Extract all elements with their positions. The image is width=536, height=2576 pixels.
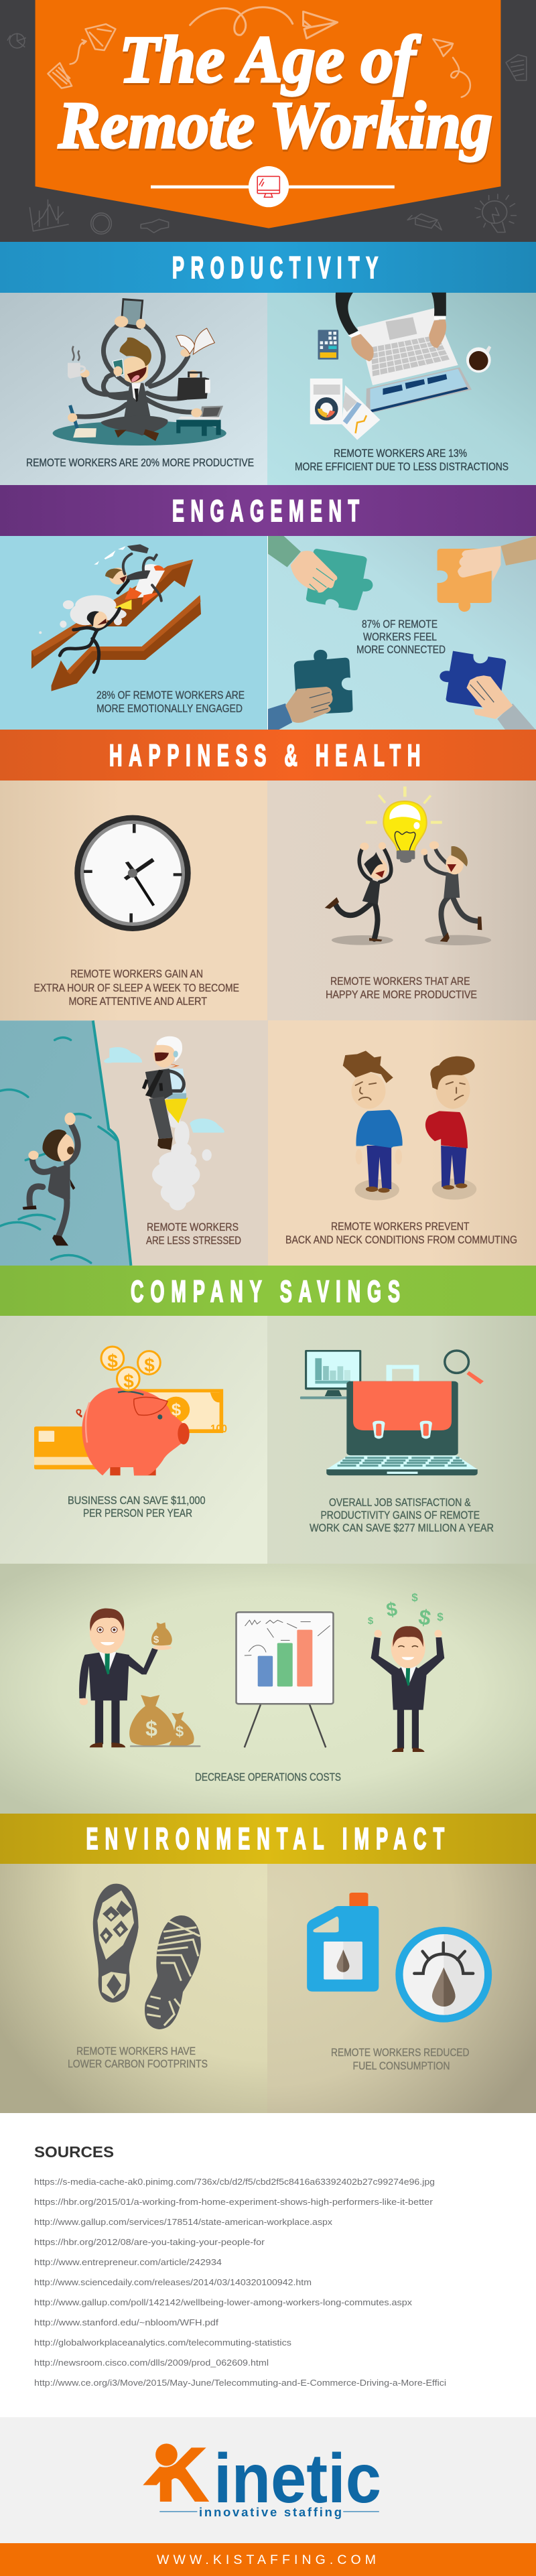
dollar signs: $	[153, 1634, 159, 1645]
caption: WORKERS FEEL	[363, 631, 437, 643]
caption: HAPPY ARE MORE PRODUCTIVE	[326, 989, 477, 1001]
footer: Kinetic logo	[0, 2417, 536, 2543]
footer band: website: WWW.KISTAFFING.COM	[157, 2553, 376, 2567]
heading band: company savings	[0, 1266, 536, 1316]
caption	[68, 1495, 206, 1519]
footer band: website	[0, 2543, 536, 2576]
icon: fuel can and gauge	[307, 1893, 492, 2023]
panel: 20% more productive	[0, 293, 267, 485]
caption	[326, 975, 477, 1001]
caption: MORE EMOTIONALLY ENGAGED	[96, 703, 243, 715]
coin and note labels: $	[172, 1400, 182, 1420]
source links: https://hbr.org/2012/08/are-you-taking-your-people-for	[34, 2237, 265, 2247]
header: title banner	[0, 0, 536, 242]
caption	[295, 448, 509, 473]
dollar signs: $	[411, 1591, 418, 1604]
cheering man	[371, 1626, 444, 1752]
illustration: piggy bank with coins	[34, 1347, 223, 1475]
caption: PRODUCTIVITY GAINS OF REMOTE	[320, 1509, 480, 1521]
caption: REMOTE WORKERS HAVE	[76, 2045, 196, 2057]
caption: PER PERSON PER YEAR	[83, 1507, 192, 1519]
dollar signs: $	[145, 1716, 157, 1741]
title: Remote Working	[58, 88, 492, 162]
man with money bag	[79, 1609, 172, 1747]
caption: MORE ATTENTIVE AND ALERT	[68, 996, 207, 1008]
caption: REMOTE WORKERS GAIN AN	[70, 968, 203, 980]
title: The Age of	[119, 22, 421, 96]
panel: extra hour of sleep	[0, 781, 267, 1020]
panel: less stressed	[0, 1020, 268, 1266]
caption: 87% OF REMOTE	[362, 618, 438, 630]
title	[58, 22, 492, 162]
heading band: environmental impact: ENVIRONMENTAL IMPACT	[86, 1822, 444, 1856]
caption: REMOTE WORKERS	[147, 1221, 239, 1233]
panel: emotionally engaged	[0, 536, 267, 730]
coin and note labels	[107, 1351, 227, 1435]
source links: https://hbr.org/2015/01/a-working-from-home-experiment-shows-high-performers-like-it-better	[34, 2197, 433, 2207]
panel: 13% more efficient	[267, 293, 536, 485]
logo tagline: innovative staffing	[199, 2505, 342, 2519]
caption: REMOTE WORKERS PREVENT	[331, 1221, 469, 1233]
caption	[68, 2045, 208, 2070]
money bags	[129, 1623, 194, 1747]
coin and note labels: $	[123, 1371, 134, 1392]
heading band: productivity: PRODUCTIVITY	[172, 251, 378, 285]
source links	[34, 2177, 446, 2388]
caption	[356, 618, 446, 656]
illustration: laptop from above	[310, 293, 491, 440]
caption: LOWER CARBON FOOTPRINTS	[68, 2058, 208, 2070]
heading band: happiness and health	[0, 730, 536, 781]
doodles on banner	[48, 7, 470, 97]
orange pennant banner	[36, 0, 500, 228]
dollar signs: $	[176, 1723, 184, 1740]
dollar signs: $	[368, 1615, 374, 1627]
heading band: engagement	[0, 485, 536, 536]
coin and note labels: 100	[210, 1422, 227, 1435]
illustration: businessmen and chart board	[79, 1609, 444, 1752]
panel: happy workers	[267, 781, 536, 1020]
illustration: puzzle pieces and hands	[268, 536, 536, 731]
heading band: happiness and health: HAPPINESS & HEALTH	[109, 738, 420, 772]
source links: http://www.stanford.edu/~nbloom/WFH.pdf	[34, 2317, 218, 2327]
illustration: arrows and rocket	[31, 544, 201, 691]
caption: ARE LESS STRESSED	[146, 1235, 241, 1247]
icon: wall clock	[74, 815, 191, 931]
caption: OVERALL JOB SATISFACTION &	[329, 1497, 470, 1509]
panel: feel more connected	[268, 536, 536, 731]
dollar signs: $	[385, 1599, 399, 1621]
background doodles on dark	[7, 33, 527, 234]
source links: http://www.gallup.com/services/178514/state-american-workplace.aspx	[34, 2217, 333, 2227]
panel: save $11,000	[0, 1316, 267, 1564]
caption	[96, 689, 245, 715]
caption	[146, 1221, 241, 1247]
sources heading: SOURCES	[34, 2143, 114, 2161]
illustration: briefcase on laptop	[300, 1350, 484, 1475]
logo mark: orange K figure	[143, 2443, 379, 2512]
flip chart	[237, 1612, 333, 1747]
caption	[331, 2047, 470, 2072]
illustration: two sad men	[343, 1050, 476, 1201]
icon: shoe soles	[93, 1884, 201, 2029]
source links: http://globalworkplaceanalytics.com/telecommuting-statistics	[34, 2337, 292, 2348]
caption: FUEL CONSUMPTION	[352, 2060, 450, 2072]
source links: http://www.sciencedaily.com/releases/2014/03/140320100942.htm	[34, 2277, 312, 2287]
source links: https://s-media-cache-ak0.pinimg.com/736x/cb/d2/f5/cbd2f5c8416a63392402b27c99274e96.jpg	[34, 2177, 435, 2187]
dollar signs: $	[417, 1605, 433, 1630]
caption: BUSINESS CAN SAVE $11,000	[68, 1495, 206, 1507]
source links: http://www.ce.org/i3/Move/2015/May-June/Telecommuting-and-E-Commerce-Driving-a-More-Effici	[34, 2378, 446, 2388]
caption: REMOTE WORKERS ARE 20% MORE PRODUCTIVE	[26, 457, 254, 469]
caption: DECREASE OPERATIONS COSTS	[195, 1771, 341, 1783]
heading band: engagement: ENGAGEMENT	[172, 494, 359, 528]
caption: MORE CONNECTED	[356, 644, 446, 656]
source links: http://newsroom.cisco.com/dlls/2009/prod_062609.html	[34, 2358, 269, 2368]
illustration: multitasking businessman	[53, 298, 226, 446]
caption	[310, 1497, 494, 1534]
illustration: two men and light bulb	[325, 787, 491, 945]
dollar signs: $	[437, 1611, 444, 1623]
divider line with monitor badge	[151, 166, 395, 207]
caption: REMOTE WORKERS ARE 13%	[334, 448, 467, 460]
caption: REMOTE WORKERS REDUCED	[331, 2047, 470, 2059]
panel: job satisfaction saves $277 million	[267, 1316, 536, 1564]
panel: decrease operations costs	[0, 1564, 536, 1814]
source links: http://www.entrepreneur.com/article/242934	[34, 2257, 222, 2267]
caption: WORK CAN SAVE $277 MILLION A YEAR	[310, 1522, 494, 1534]
illustration: cliff climber and jetpack man	[0, 1020, 224, 1266]
coin and note labels: $	[107, 1351, 118, 1371]
caption	[34, 968, 239, 1008]
coin and note labels: $	[144, 1355, 155, 1375]
heading band: environmental impact	[0, 1814, 536, 1864]
panel: back and neck conditions	[268, 1020, 536, 1266]
panel: lower carbon footprints	[0, 1864, 267, 2113]
panel: reduced fuel consumption	[267, 1864, 536, 2113]
heading band: company savings: COMPANY SAVINGS	[131, 1274, 400, 1308]
caption: REMOTE WORKERS THAT ARE	[330, 975, 470, 988]
caption	[285, 1221, 517, 1246]
source links: http://www.gallup.com/poll/142142/wellbeing-lower-among-workers-long-commutes.aspx	[34, 2297, 413, 2307]
logo wordmark: inetic	[214, 2440, 381, 2518]
caption: 28% OF REMOTE WORKERS ARE	[96, 689, 245, 701]
sources list	[34, 2143, 446, 2388]
dollar signs	[145, 1591, 444, 1741]
heading band: productivity	[0, 242, 536, 293]
caption: EXTRA HOUR OF SLEEP A WEEK TO BECOME	[34, 982, 239, 994]
